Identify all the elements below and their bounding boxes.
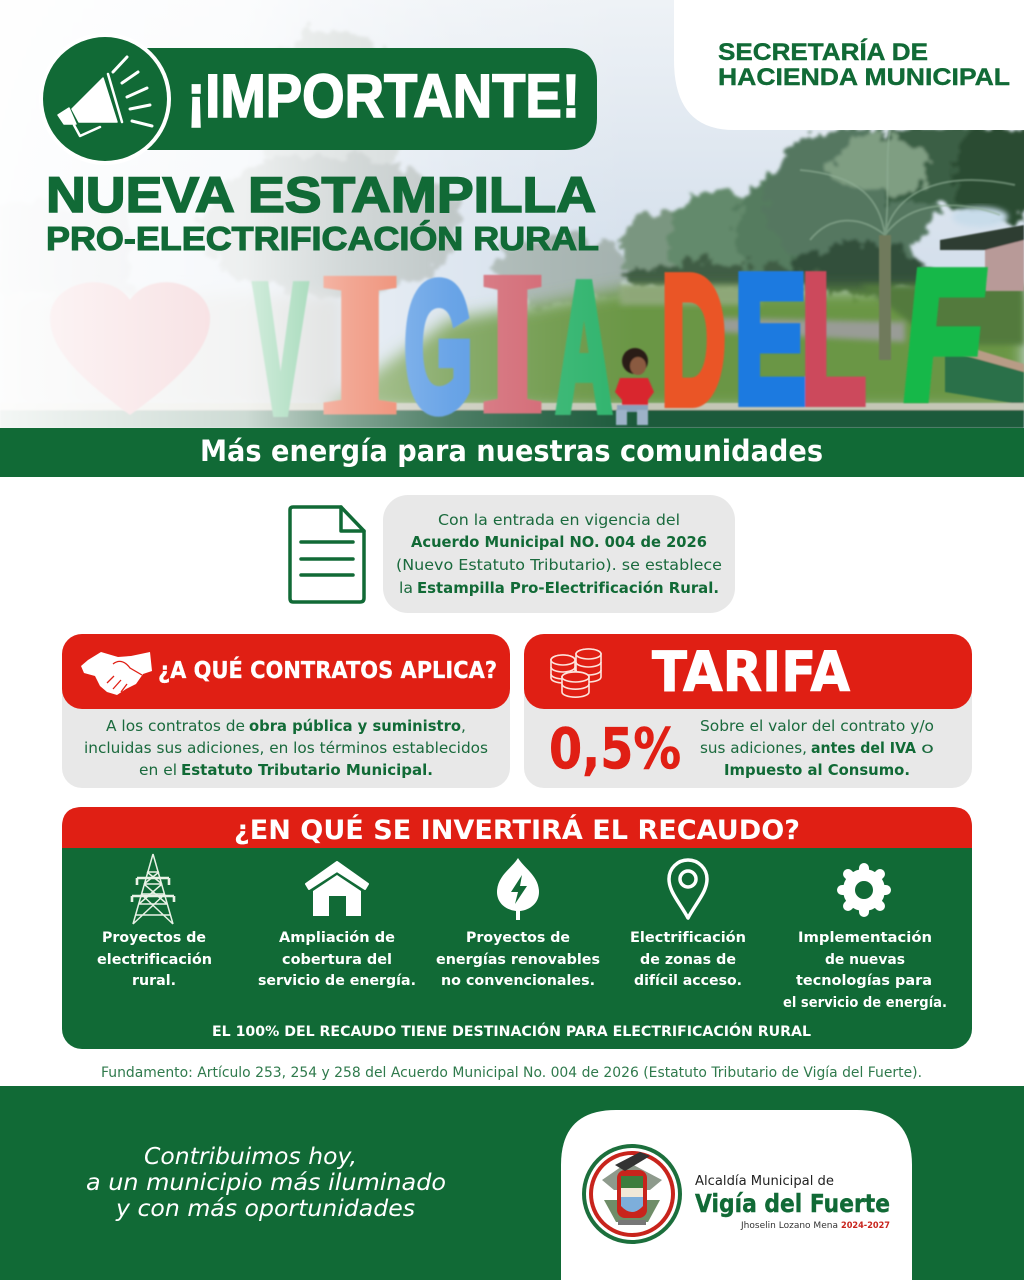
logo text: Jhoselin Lozano Mena [740,1221,838,1231]
tab: Secretaría de Hacienda Municipal [674,0,1024,130]
banner: ¡Importante! [39,33,597,165]
sign letters: A [556,244,612,449]
column: ampliación de cobertura [258,930,416,989]
column: energías renovables: no convencionales. [441,973,595,989]
column: ampliación de cobertura: servicio de energía. [258,973,416,989]
column: nuevas tecnologías: el servicio de energía. [783,995,947,1011]
column: nuevas tecnologías: tecnologías para [796,973,932,989]
foliage on the right [620,123,1024,296]
column: zonas de difícil acceso: difícil acceso. [634,973,742,989]
logo text: Vigía del Fuerte [695,1189,890,1218]
panel: a qué contratos aplica [62,634,510,788]
panel: tarifa: o [921,739,934,757]
sign letters: D [661,237,726,442]
icon: handshake [81,652,152,695]
column: nuevas tecnologías: Implementación [798,930,932,946]
sign letters: I [480,230,545,456]
sign letters [50,230,993,457]
column: energías renovables: energías renovables [436,952,600,968]
title: Nueva Estampilla: NUEVA ESTAMPILLA [46,167,596,223]
column: ampliación de cobertura: Ampliación de [279,930,395,946]
panel: acuerdo text: Acuerdo Municipal NO. 004 de 2026 [411,533,707,551]
panel: acuerdo text [383,495,735,613]
icon: location pin [669,860,707,918]
sign letters: F [895,232,993,437]
closing message: a un municipio más iluminado [86,1170,446,1196]
panel: a qué contratos aplica: incluidas sus adiciones, en los términos establecidos [84,739,488,757]
panel: tarifa: 0,5% [549,717,681,782]
column: energías renovables: Proyectos de [466,930,570,946]
sign letters: E [734,236,807,441]
sign letters: V [254,246,307,451]
legal note: Fundamento: Artículo 253, 254 y 258 del Acuerdo Municipal No. 004 de 2026 (Estatuto Tributario de Vigía del Fuerte). [101,1065,922,1081]
column: proyectos de electrificación rural [97,930,212,989]
column: zonas de difícil acceso: Electrificación [630,930,746,946]
panel: a qué contratos aplica: Estatuto Tributario Municipal. [181,761,433,779]
tab: Secretaría de Hacienda Municipal: HACIENDA MUNICIPAL [718,64,1010,91]
panel: a qué contratos aplica: obra pública y suministro [249,717,461,735]
logo text [695,1174,890,1231]
panel: a qué contratos aplica: en el [139,761,177,779]
pale background trees [0,30,630,305]
column: nuevas tecnologías: de nuevas [825,952,905,968]
panel: tarifa: TARIFA [652,640,850,704]
icon: gear [842,868,886,912]
panel: a qué contratos aplica: , [461,717,466,735]
icon: leaf with bolt [497,858,539,920]
panel: tarifa [524,634,972,788]
column: proyectos de electrificación rural: electrificación [97,952,212,968]
logo text: 2024-2027 [841,1221,890,1231]
column: energías renovables [436,930,600,989]
palm fronds [800,130,1015,240]
footer band [0,1086,1024,1280]
hero photo: Vigía del F sign [0,0,1024,457]
icon: megaphone [58,57,152,136]
panel: en qué se invertirá el recaudo: EL 100% DEL RECAUDO TIENE DESTINACIÓN PARA ELECTRIFICACIÓN RURAL [212,1022,811,1040]
band: slogan: Más energía para nuestras comunidades [200,434,823,468]
sign letters: L [801,236,866,441]
panel: en qué se invertirá el recaudo [62,807,972,1049]
panel: tarifa: sus adiciones, [700,739,807,757]
panel: tarifa: Impuesto al Consumo. [724,761,910,779]
logo: municipal seal [582,1144,682,1244]
column: nuevas tecnologías [783,930,947,1011]
ground [0,290,1024,410]
column: zonas de difícil acceso: de zonas de [640,952,736,968]
panel: tarifa: antes del IVA [811,739,916,757]
icon: power tower [132,854,174,924]
band: slogan [0,428,1024,477]
panel: tarifa: Sobre el valor del contrato y/o [700,717,934,735]
column: proyectos de electrificación rural: Proyectos de [102,930,206,946]
icon: house [306,862,368,916]
closing message: y con más oportunidades [115,1196,415,1222]
closing message [86,1144,446,1222]
column: ampliación de cobertura: cobertura del [282,952,392,968]
panel: en qué se invertirá el recaudo: ¿EN QUÉ SE INVERTIRÁ EL RECAUDO? [234,814,800,846]
child sitting on the sign [615,348,654,425]
subtitle: Pro-Electrificación Rural: PRO-ELECTRIFICACIÓN RURAL [46,220,599,258]
panel: acuerdo text: la [399,579,413,597]
panel: acuerdo text: (Nuevo Estatuto Tributario). se establece [396,556,722,574]
panel: a qué contratos aplica: ¿A QUÉ CONTRATOS APLICA? [158,656,497,684]
banner: ¡Importante!: ¡IMPORTANTE! [187,62,580,130]
panel: a qué contratos aplica: A los contratos de [106,717,245,735]
column: zonas de difícil acceso [630,930,746,989]
icon: document [290,507,364,602]
icon: coins [551,649,601,697]
sign letters: G [404,244,473,449]
logo text: Alcaldía Municipal de [695,1174,834,1189]
sign letters: I [319,231,401,457]
column: proyectos de electrificación rural: rural. [132,973,176,989]
tab: Secretaría de Hacienda Municipal: SECRETARÍA DE [718,38,928,66]
closing message: Contribuimos hoy, [144,1144,357,1170]
panel: acuerdo text: Estampilla Pro-Electrificación Rural. [417,579,719,597]
panel: acuerdo text: Con la entrada en vigencia del [438,511,680,529]
